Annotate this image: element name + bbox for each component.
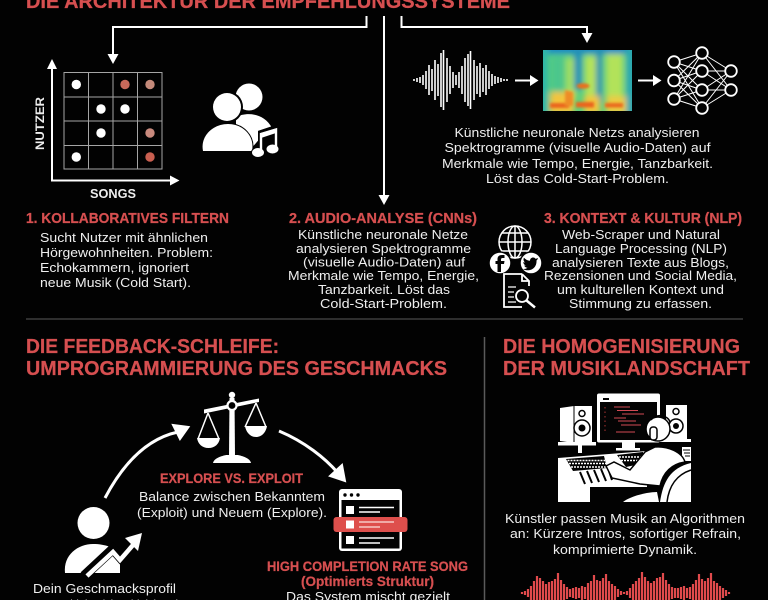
arrow: profile to balance bbox=[105, 425, 188, 498]
text: context and culture description: Web-Scraper und Natural bbox=[562, 227, 720, 242]
icon: red compressed waveform bbox=[522, 572, 729, 600]
arrow: to audio analysis bbox=[378, 16, 390, 205]
heading: homogenization: DIE HOMOGENISIERUNG bbox=[503, 336, 740, 358]
icon: playlist browser window bbox=[334, 489, 408, 551]
text: taste profile: Dein Geschmacksprofil bbox=[33, 581, 176, 596]
icon: producer at mixing desk bbox=[558, 394, 691, 502]
chart: user-song matrix: SONGS bbox=[90, 187, 136, 201]
text: spectrogram description: Künstliche neuronale Netzs analysieren bbox=[454, 125, 700, 140]
text: collaborative filtering description: neue Musik (Cold Start). bbox=[40, 275, 191, 290]
heading: context and culture: 3. KONTEXT & KULTUR (NLP) bbox=[544, 211, 742, 227]
icon: users with music note bbox=[203, 84, 278, 157]
text: audio analysis description: analysieren Spektrogramme bbox=[296, 241, 471, 256]
text: audio analysis description: Cold-Start-Problem. bbox=[320, 296, 447, 311]
text: homogenization description: komprimierte Dynamik. bbox=[553, 542, 697, 557]
text: homogenization description: Künstler passen Musik an Algorithmen bbox=[505, 511, 745, 526]
icon: balance scale bbox=[197, 392, 267, 463]
heading: collaborative filtering: 1. KOLLABORATIVES FILTERN bbox=[26, 211, 229, 227]
text: homogenization description bbox=[505, 511, 745, 557]
heading: audio analysis: 2. AUDIO-ANALYSE (CNNs) bbox=[289, 211, 477, 227]
text: context and culture description: um kulturellen Kontext und bbox=[557, 282, 724, 297]
text: explore vs exploit description bbox=[137, 489, 327, 520]
heading: explore vs exploit: EXPLORE VS. EXPLOIT bbox=[160, 471, 304, 486]
heading: feedback loop: DIE FEEDBACK-SCHLEIFE: bbox=[26, 336, 279, 358]
heading: feedback loop: UMPROGRAMMIERUNG DES GESCHMACKS bbox=[26, 358, 447, 380]
text: audio analysis description: Merkmale wie Tempo, Energie, bbox=[288, 268, 479, 283]
text: audio analysis description: Künstliche neuronale Netze bbox=[298, 227, 468, 242]
chart: user-song matrix: NUTZER bbox=[33, 97, 47, 150]
text: audio analysis description: Tanzbarkeit. Löst das bbox=[318, 282, 451, 297]
chart: spectrogram bbox=[543, 50, 632, 111]
text: audio analysis description: (visuelle Audio-Daten) auf bbox=[303, 254, 465, 270]
text: explore vs exploit description: Balance zwischen Bekanntem bbox=[139, 489, 325, 504]
arrow: waveform to spectrogram bbox=[515, 75, 538, 86]
arrow: spectrogram to neural network bbox=[638, 75, 662, 86]
text: spectrogram description bbox=[442, 125, 713, 186]
text: explore vs exploit description: (Exploit) und Neuem (Explore). bbox=[137, 505, 327, 520]
icon: audio waveform bbox=[414, 50, 507, 110]
text: collaborative filtering description bbox=[40, 230, 213, 290]
text: context and culture description: Language Processing (NLP) bbox=[555, 241, 727, 256]
text: homogenization description: an: Kürzere Intros, sofortiger Refrain, bbox=[510, 526, 741, 541]
arrow: to spectrogram bbox=[402, 16, 592, 43]
heading: high completion rate song: HIGH COMPLETION RATE SONG bbox=[267, 559, 468, 574]
text: collaborative filtering description: Hörgewohnheiten. Problem: bbox=[40, 245, 213, 260]
icon: globe, social media and document bbox=[489, 226, 542, 308]
text: collaborative filtering description: Echokammern, ignoriert bbox=[40, 260, 189, 275]
text: context and culture description: Stimmung zu erfassen. bbox=[569, 296, 712, 311]
text: spectrogram description: Löst das Cold-Start-Problem. bbox=[486, 171, 669, 186]
heading: homogenization bbox=[503, 336, 750, 380]
text: spectrogram description: Merkmale wie Tempo, Energie, Tanzbarkeit. bbox=[442, 156, 713, 171]
text: context and culture description bbox=[544, 227, 737, 311]
heading: high completion rate song: (Optimierts Struktur) bbox=[301, 574, 434, 589]
heading: feedback loop bbox=[26, 336, 447, 380]
text: collaborative filtering description: Sucht Nutzer mit ähnlichen bbox=[40, 230, 208, 245]
chart: user-song matrix bbox=[33, 59, 180, 201]
text: context and culture description: Rezensionen und Social Media, bbox=[544, 268, 737, 283]
arrow: balance to song bbox=[279, 431, 345, 481]
arrow: to collaborative filtering bbox=[108, 16, 366, 64]
icon: person with rising arrow bbox=[65, 507, 142, 576]
text: context and culture description: analysieren Texte aus Blogs, bbox=[552, 255, 729, 270]
text: spectrogram description: Spektrogramme (visuelle Audio-Daten) auf bbox=[444, 140, 711, 155]
heading: high completion rate song bbox=[267, 559, 468, 589]
text: audio analysis description bbox=[288, 227, 479, 311]
icon: neural network bbox=[668, 47, 737, 114]
heading: homogenization: DER MUSIKLANDSCHAFT bbox=[503, 358, 750, 380]
